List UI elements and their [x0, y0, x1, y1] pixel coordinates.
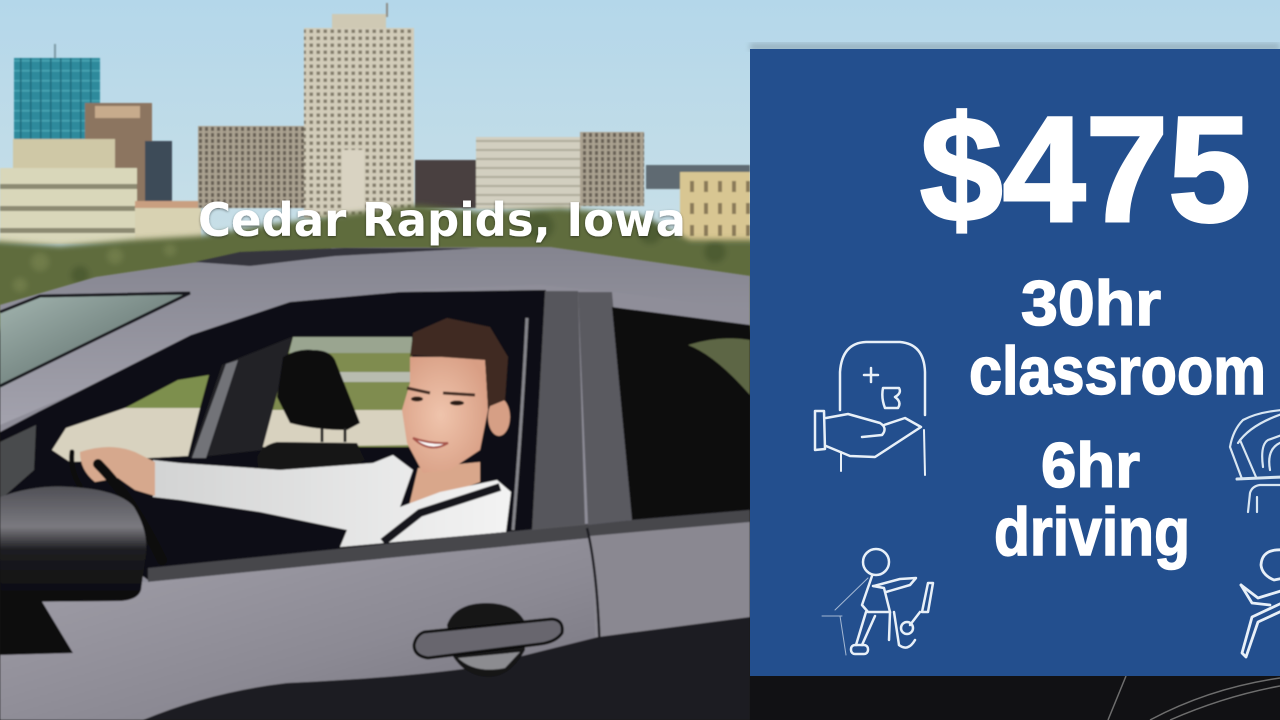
- panel shadow: [750, 43, 1280, 51]
- driver: [72, 318, 511, 560]
- shirt torso and arm: [153, 455, 511, 547]
- icon: figure with tools: [822, 549, 933, 655]
- seat back: [257, 442, 365, 470]
- centre pillar: [578, 292, 632, 525]
- B pillar: [532, 291, 585, 530]
- icon: hand holding card: [815, 342, 925, 475]
- ear: [488, 398, 510, 436]
- driving label: driving: [994, 494, 1190, 570]
- panel: course details: [750, 49, 1280, 676]
- window inner trim: [513, 318, 527, 530]
- eyes: [411, 396, 464, 406]
- location title: Cedar Rapids, Iowa: [198, 193, 686, 247]
- quarter glass: [0, 425, 36, 500]
- front door panel: [0, 538, 600, 720]
- background: sky: [0, 0, 1280, 320]
- building: distant blue block: [646, 165, 750, 189]
- view through window: pale road: [262, 410, 412, 447]
- windshield frame: [0, 293, 190, 386]
- seat belt: [383, 487, 500, 542]
- building: teal glass tower: [14, 44, 100, 142]
- view through window: front left grass: [125, 375, 209, 408]
- rear window glimpse: [688, 338, 750, 395]
- mirror stalk: [0, 590, 73, 655]
- dark lower body: [143, 617, 750, 720]
- steering wheel: [72, 452, 162, 560]
- building: dark brick: [415, 160, 477, 208]
- icon: clipped machine: [1230, 410, 1280, 512]
- bottom black strip: [750, 676, 1280, 720]
- view through window: pale horizon: [289, 337, 412, 353]
- face: [402, 357, 488, 473]
- car body base: [0, 247, 750, 720]
- building: low white block: [0, 168, 137, 244]
- hand on wheel: [80, 447, 155, 496]
- building: low annex: [135, 201, 201, 244]
- door handle: [414, 619, 562, 658]
- neck: [408, 462, 480, 510]
- front window frame: [0, 290, 546, 580]
- building: yellow block: [680, 172, 750, 244]
- view through window: front left road: [52, 408, 200, 462]
- wing mirror: [0, 486, 146, 602]
- building: white slab: [476, 137, 581, 209]
- classroom hours number: 30hr: [1021, 269, 1161, 339]
- view through window: pale strip: [282, 372, 412, 382]
- interior door pillar: [190, 337, 292, 458]
- wheel sketch lines: [1108, 676, 1280, 720]
- price: $475: [920, 85, 1251, 253]
- building: white slab right: [580, 132, 644, 206]
- door seam: [587, 528, 600, 720]
- headrest posts: [322, 428, 345, 442]
- car: [0, 247, 750, 720]
- building: cream block: [13, 139, 115, 171]
- building: grey mid-rise: [198, 126, 304, 208]
- sunroof shadow: [195, 248, 480, 266]
- hair: [410, 318, 508, 407]
- door upper sill: [148, 510, 750, 582]
- windshield: [0, 293, 190, 388]
- view through window: far field: [262, 337, 412, 447]
- eyebrows: [407, 388, 475, 395]
- rear door panel: [590, 522, 750, 720]
- recess reflection: [458, 652, 520, 670]
- building: tall round tower: [304, 3, 414, 218]
- driving hours number: 6hr: [1041, 431, 1140, 501]
- seat headrest: [277, 350, 360, 430]
- door handle recess: [447, 603, 525, 677]
- icon: clipped figure: [1241, 550, 1280, 657]
- rear window: [612, 307, 750, 520]
- smile: [413, 438, 448, 447]
- building: dark tower: [145, 141, 172, 203]
- trees: [0, 205, 770, 330]
- building: brown tower: [85, 103, 152, 203]
- car roof: [0, 247, 750, 425]
- pillar highlight: [192, 360, 238, 458]
- city skyline: [0, 3, 750, 244]
